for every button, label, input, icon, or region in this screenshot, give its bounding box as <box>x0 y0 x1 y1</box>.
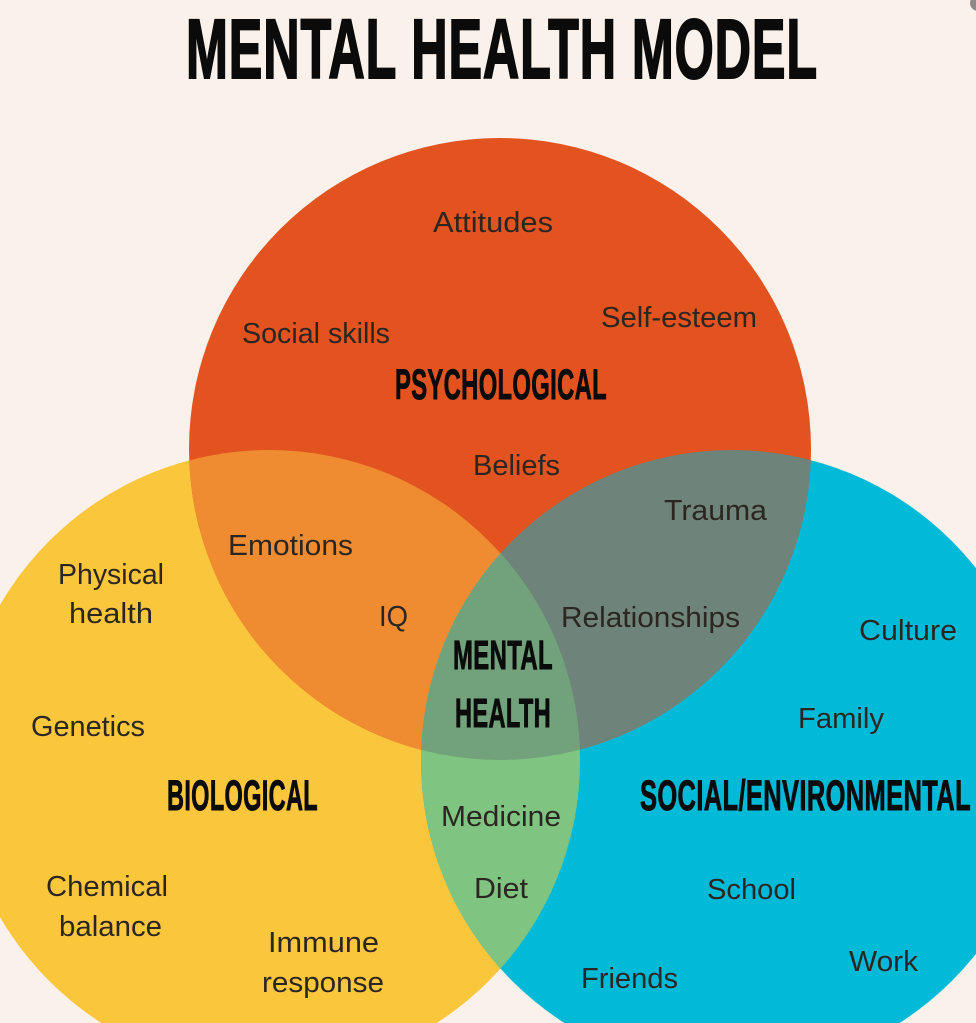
labels: psychological: Self-esteem <box>601 302 757 334</box>
labels: biological: Immune <box>268 927 379 959</box>
labels: biological and social: Medicine <box>441 801 561 833</box>
circle: psychological <box>189 138 811 760</box>
heading: biological: BIOLOGICAL <box>167 772 318 820</box>
overlap: centre <box>421 554 580 760</box>
labels: social/environmental <box>581 615 957 995</box>
overlap: psychological and biological <box>190 450 500 750</box>
heading: mental health <box>453 632 553 736</box>
labels: biological: health <box>69 598 153 630</box>
labels: biological: balance <box>59 911 162 943</box>
labels: psychological and social <box>561 495 768 634</box>
labels: social/environmental: Culture <box>859 615 957 647</box>
heading: mental health: HEALTH <box>455 690 551 736</box>
labels: biological: Chemical <box>46 871 168 903</box>
labels: social/environmental: Family <box>798 703 884 735</box>
overlap: psychological and social <box>421 450 811 750</box>
labels: biological: response <box>262 967 384 999</box>
labels: social/environmental: Friends <box>581 963 678 995</box>
labels: psychological: Social skills <box>242 318 390 350</box>
labels: psychological and biological <box>228 530 408 633</box>
heading: psychological: PSYCHOLOGICAL <box>395 361 607 409</box>
labels: psychological: Attitudes <box>433 207 553 239</box>
labels: psychological and social: Trauma <box>664 495 768 527</box>
labels: biological: Physical <box>58 559 164 591</box>
labels: psychological: Beliefs <box>473 450 560 482</box>
labels: biological <box>31 559 384 999</box>
circle: social/environmental <box>421 450 976 1023</box>
labels: psychological and biological: IQ <box>379 601 408 633</box>
labels: biological and social <box>441 801 561 905</box>
labels: psychological and biological: Emotions <box>228 530 353 562</box>
labels: biological: Genetics <box>31 711 145 743</box>
labels: biological and social: Diet <box>474 873 528 905</box>
circle: biological <box>0 450 580 1023</box>
labels: psychological <box>242 207 757 482</box>
labels: social/environmental: Work <box>849 946 919 978</box>
overlap: biological and social <box>421 554 580 968</box>
heading: mental health: MENTAL <box>453 632 553 678</box>
labels: psychological and social: Relationships <box>561 602 740 634</box>
labels: social/environmental: School <box>707 874 796 906</box>
